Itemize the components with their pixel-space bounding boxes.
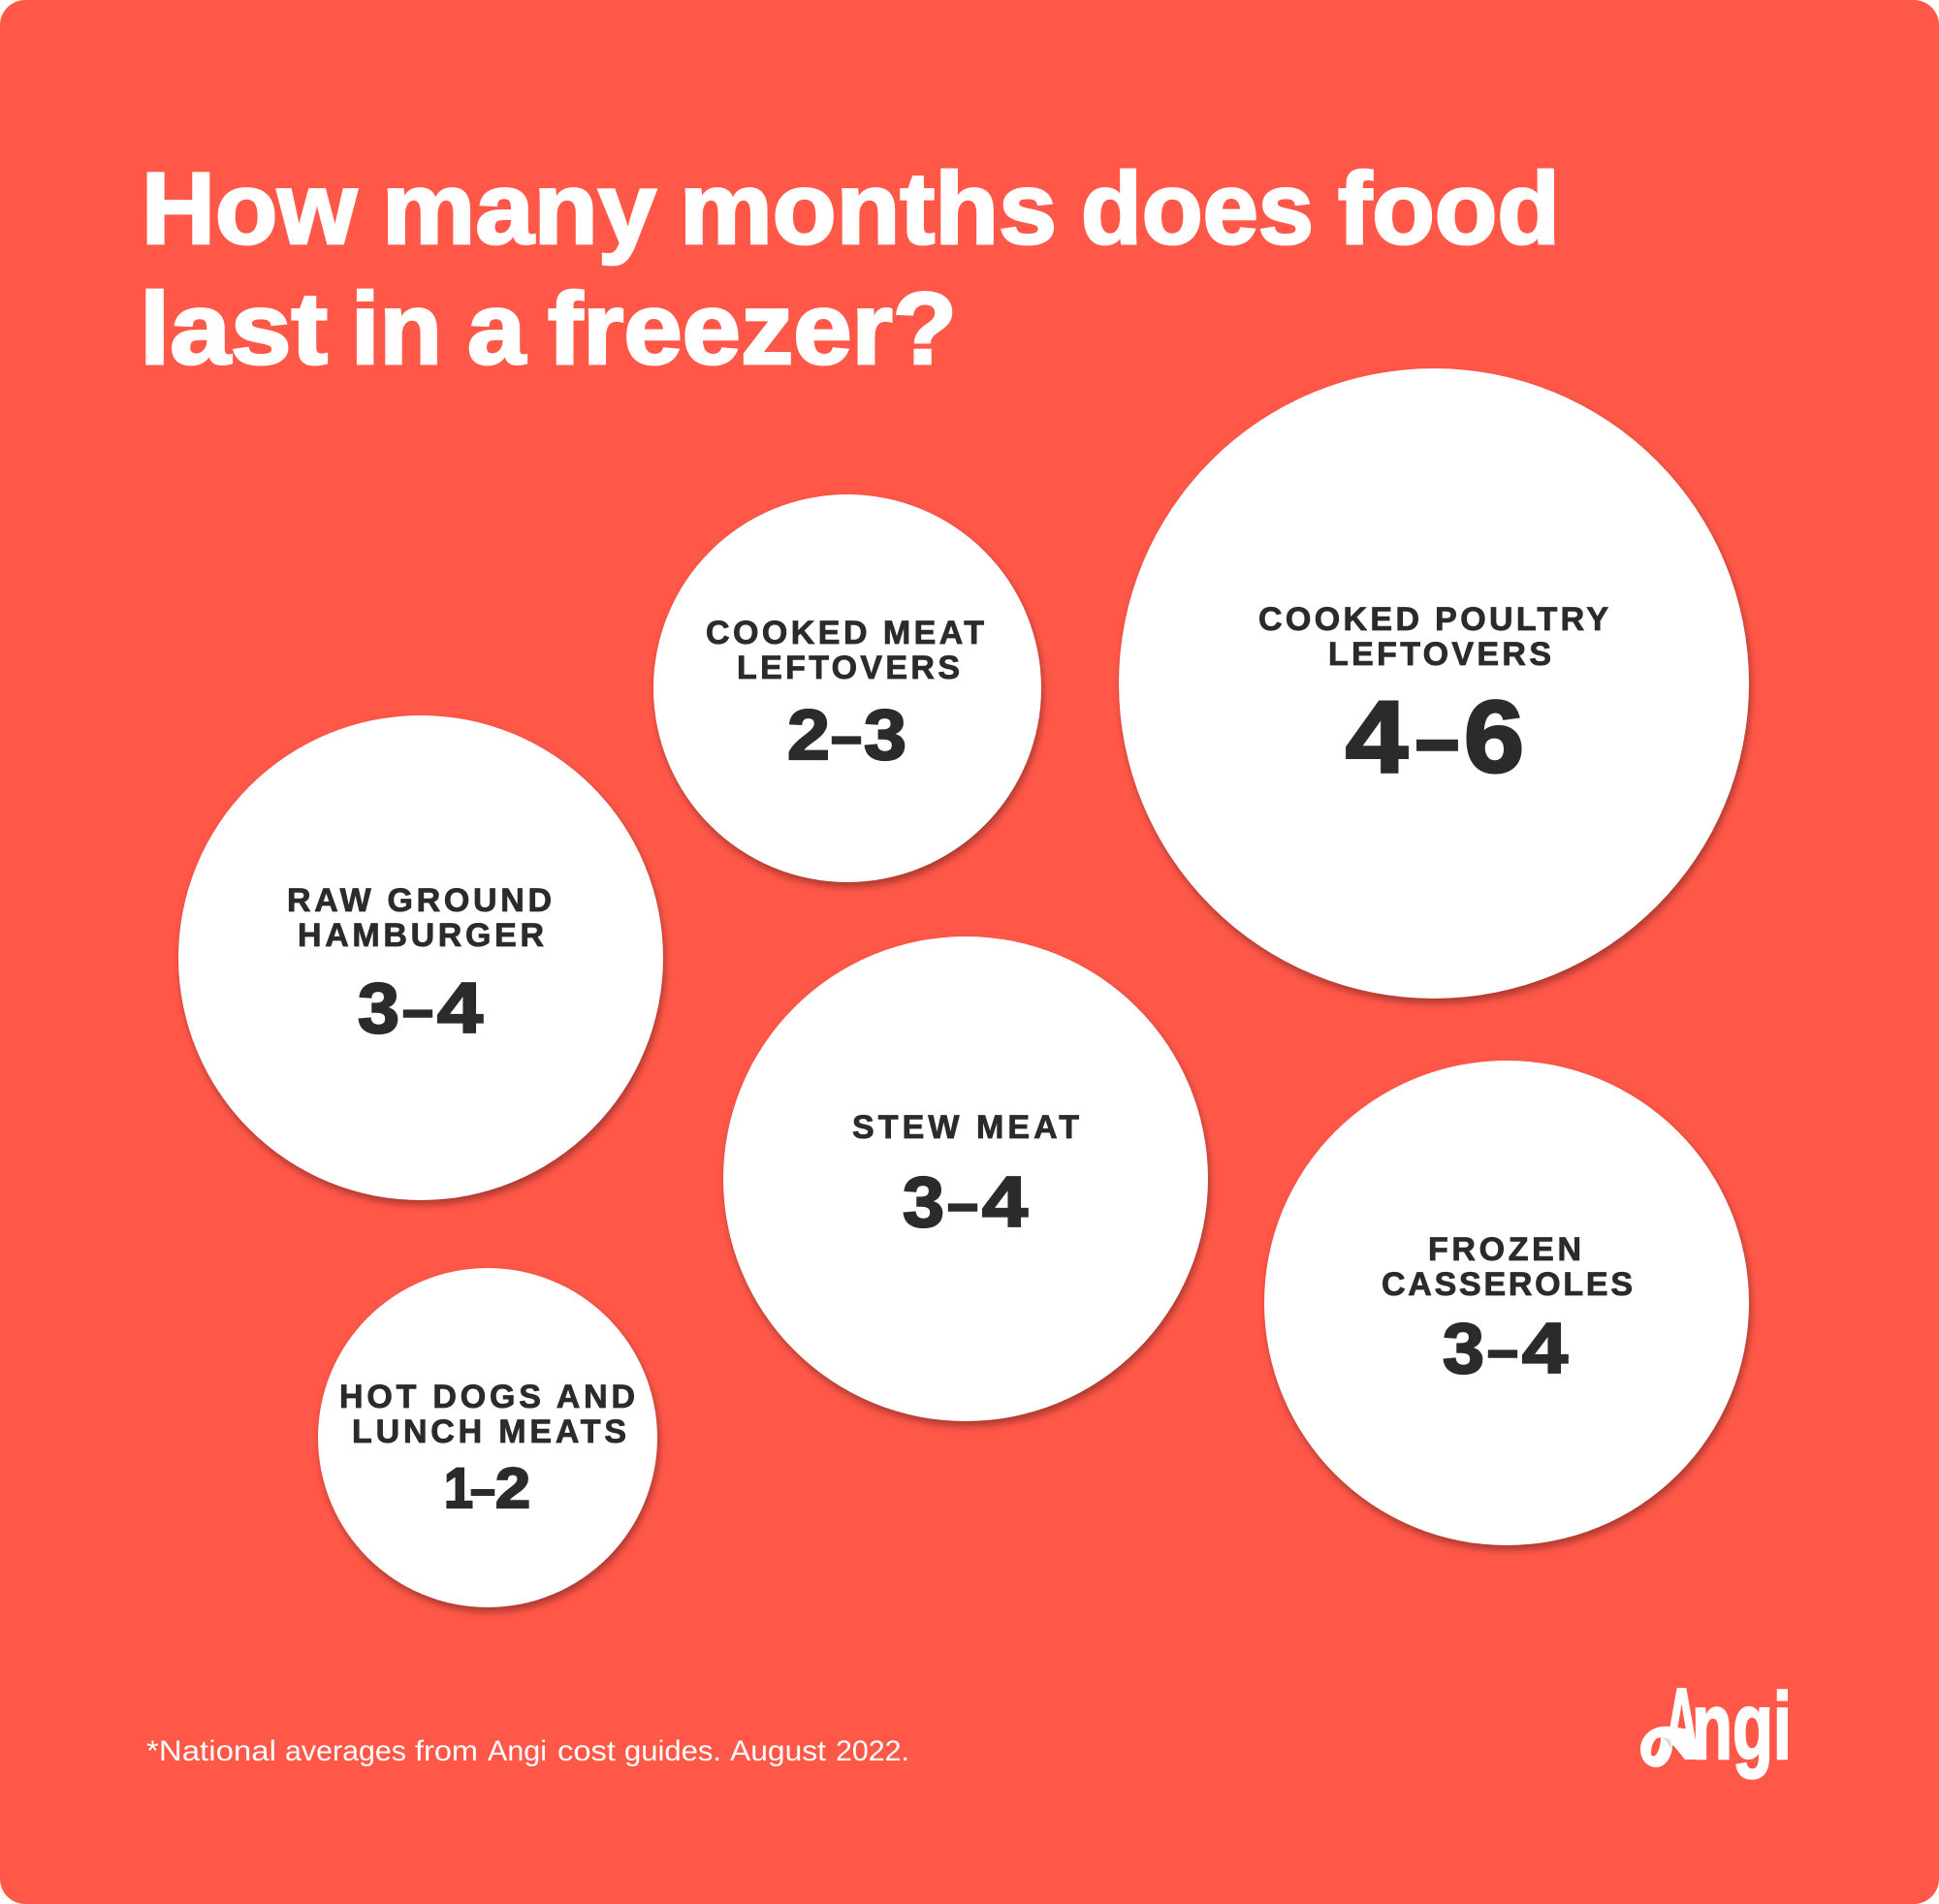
- bubble: hot dogs and lunch meats: LUNCH MEATS: [352, 1413, 626, 1450]
- bubble: frozen casseroles: FROZEN: [1428, 1231, 1581, 1268]
- bubble: hot dogs and lunch meats: 2: [495, 1457, 530, 1520]
- bubble: cooked poultry leftovers: [1119, 368, 1749, 999]
- footnote: from: [415, 1735, 478, 1767]
- bubble: frozen casseroles: –: [1488, 1323, 1517, 1378]
- title: many: [382, 152, 656, 266]
- bubble: frozen casseroles: 3: [1443, 1310, 1484, 1388]
- bubble: cooked poultry leftovers: LEFTOVERS: [1328, 636, 1551, 673]
- bubble: hot dogs and lunch meats: 1: [444, 1457, 473, 1520]
- bubble: cooked poultry leftovers: COOKED POULTRY: [1258, 601, 1608, 638]
- title: in: [351, 272, 442, 386]
- bubble: cooked meat leftovers: 3: [864, 696, 906, 775]
- bubble: cooked meat leftovers: 2: [787, 696, 830, 775]
- bubble: raw ground hamburger: HAMBURGER: [298, 917, 544, 954]
- logo: Angi: [1640, 1668, 1792, 1781]
- bubble: cooked meat leftovers: [653, 494, 1041, 882]
- footnote: 2022.: [836, 1735, 909, 1767]
- footnote: guides.: [624, 1735, 721, 1767]
- footnote: Angi: [488, 1735, 547, 1767]
- footnote: *National: [146, 1735, 276, 1767]
- bubble: frozen casseroles: 4: [1522, 1310, 1568, 1388]
- logo: Angi: A: [1664, 1668, 1700, 1781]
- bubble: stew meat: [723, 936, 1208, 1421]
- title: a: [467, 272, 527, 386]
- footnote: cost: [557, 1735, 617, 1767]
- footnote: August: [730, 1735, 827, 1767]
- title: last: [140, 272, 328, 386]
- bubble: cooked meat leftovers: LEFTOVERS: [737, 650, 960, 686]
- logo: Angi: ngi: [1692, 1673, 1792, 1779]
- bubble: cooked meat leftovers: COOKED MEAT: [706, 615, 984, 651]
- bubble: stew meat: 4: [982, 1163, 1028, 1242]
- bubble: cooked poultry leftovers: –: [1416, 699, 1458, 780]
- bubble: raw ground hamburger: 3: [358, 969, 399, 1048]
- bubble: raw ground hamburger: RAW GROUND: [287, 882, 552, 919]
- title: does: [1081, 152, 1314, 266]
- footnote: averages: [285, 1735, 406, 1767]
- title: food: [1338, 152, 1560, 266]
- bubble: stew meat: –: [948, 1177, 977, 1231]
- bubble: raw ground hamburger: [178, 715, 663, 1200]
- bubble: cooked meat leftovers: –: [832, 710, 861, 764]
- bubble: raw ground hamburger: 4: [437, 969, 483, 1048]
- title: How: [142, 152, 357, 266]
- bubble: cooked poultry leftovers: 6: [1464, 681, 1524, 794]
- bubble: frozen casseroles: [1264, 1061, 1749, 1545]
- bubble: hot dogs and lunch meats: HOT DOGS AND: [339, 1379, 635, 1415]
- title: [140, 152, 1560, 386]
- bubble: raw ground hamburger: –: [403, 983, 432, 1037]
- bubble: stew meat: 3: [903, 1163, 944, 1242]
- bubble: hot dogs and lunch meats: –: [471, 1469, 494, 1511]
- bubble: hot dogs and lunch meats: [318, 1268, 657, 1607]
- footnote: [146, 1735, 909, 1767]
- title: freezer?: [548, 272, 957, 386]
- bubble: cooked poultry leftovers: 4: [1346, 681, 1408, 794]
- bubble: stew meat: STEW MEAT: [852, 1109, 1079, 1146]
- bubble: frozen casseroles: CASSEROLES: [1382, 1266, 1633, 1303]
- title: months: [680, 152, 1057, 266]
